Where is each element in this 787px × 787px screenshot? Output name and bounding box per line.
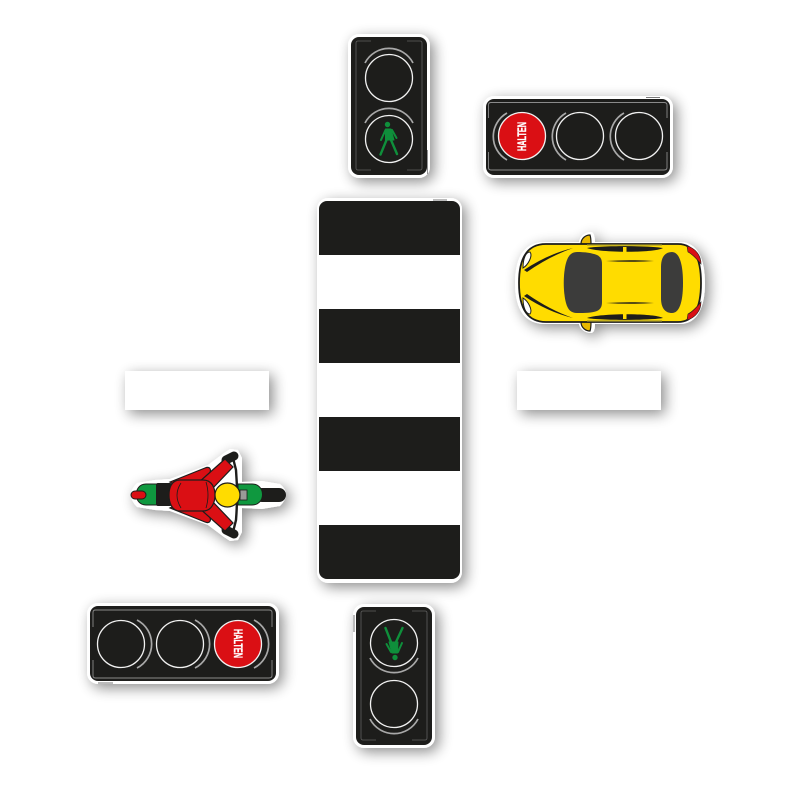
motorcycle with rider: [131, 449, 286, 541]
white label box: left: [125, 371, 269, 410]
zebra crossing: [317, 198, 462, 583]
tail lights: [687, 246, 701, 264]
handlebar: [233, 458, 237, 532]
side windows and lines: [587, 246, 663, 252]
icon: inverted green pedestrian: [386, 628, 402, 660]
traffic light: top right, red HALTEN: [483, 96, 673, 178]
pedestrian signal: top, green walking figure: [348, 34, 430, 178]
label: HALTEN: HALTEN: [231, 629, 245, 658]
headlights: [523, 252, 531, 268]
rear window: [661, 252, 683, 313]
helmet: [215, 483, 240, 507]
yellow car: [515, 232, 705, 333]
white label box: right: [517, 371, 661, 410]
rider body: [170, 467, 210, 492]
pedestrian signal: bottom, inverted green figure: [353, 604, 435, 748]
traffic light: bottom left, red HALTEN: [87, 603, 279, 684]
windscreen: [564, 252, 602, 313]
label: HALTEN: HALTEN: [515, 122, 529, 151]
icon: green walking pedestrian: [380, 122, 397, 154]
